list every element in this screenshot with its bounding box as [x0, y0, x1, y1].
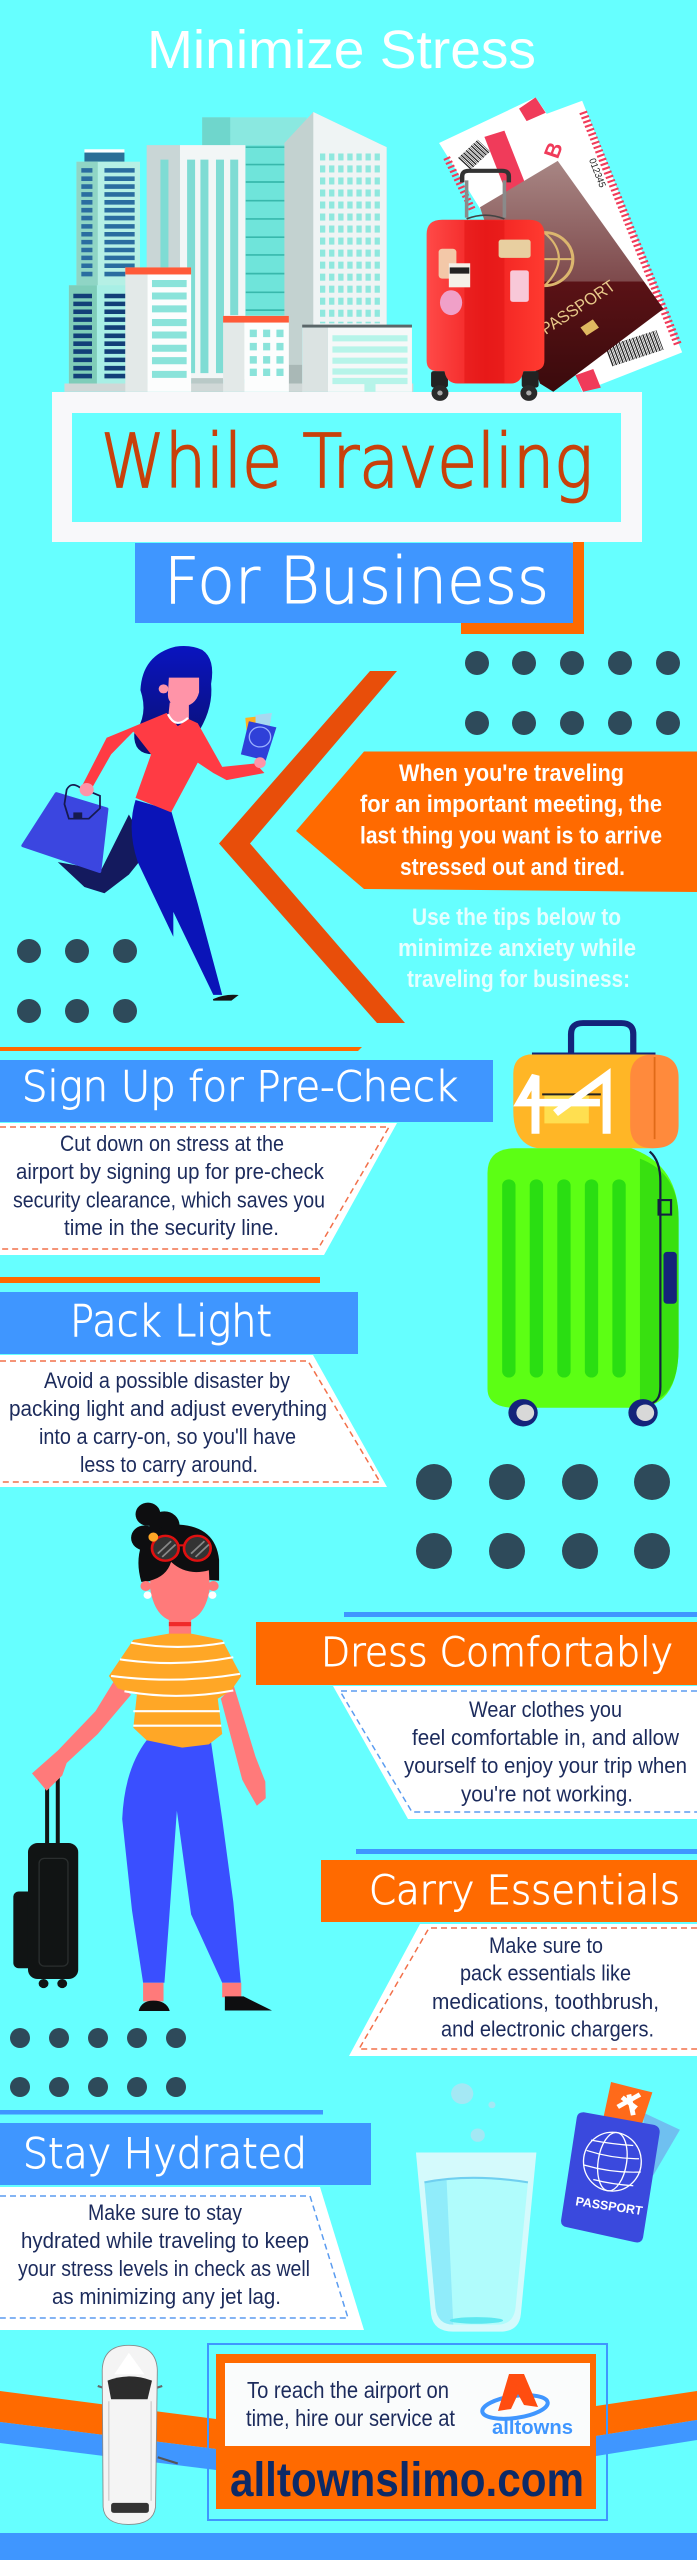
- section: Dress Comfortably: Wear clothes you: [469, 1697, 622, 1722]
- section: Stay Hydrated: your stress levels in check as well: [18, 2256, 310, 2281]
- call to action panel: [208, 2344, 607, 2520]
- pants: [122, 1740, 241, 1983]
- logo: alltowns: alltowns: [492, 2417, 573, 2439]
- section: Pack Light: into a carry-on, so you'll have: [39, 1424, 296, 1449]
- section: Sign Up for Pre-Check: Cut down on stress at the: [60, 1131, 284, 1156]
- heading bar: [0, 1060, 493, 1122]
- shoe: [213, 996, 236, 1000]
- red suitcase: [427, 171, 544, 401]
- section: Pack Light: [0, 1277, 387, 1487]
- heading text: Sign Up for Pre-Check: [22, 1062, 458, 1111]
- building: small red-top block: [223, 316, 289, 392]
- illustration: white limo top view: [98, 2345, 178, 2524]
- illustration: luggage stack: [488, 1023, 679, 1426]
- section: Stay Hydrated: [0, 2110, 371, 2330]
- heading bar: [0, 1292, 358, 1354]
- logo: alltowns: [481, 2374, 573, 2439]
- section: Carry Essentials: pack essentials like: [460, 1960, 631, 1986]
- building: striped middle tower: [147, 145, 245, 392]
- face: [150, 1562, 210, 1622]
- front leg: [132, 800, 222, 995]
- boarding pass front: [484, 101, 682, 392]
- heading text: Pack Light: [70, 1296, 272, 1347]
- section: Stay Hydrated: Make sure to stay: [88, 2200, 242, 2225]
- section: Sign Up for Pre-Check: [0, 1047, 493, 1255]
- text: use the tips: traveling for business:: [407, 966, 630, 993]
- text panel: [0, 2187, 364, 2330]
- black luggage: [13, 1773, 78, 1988]
- face and neck: [159, 678, 199, 726]
- glass: [416, 2153, 536, 2332]
- section: Pack Light: packing light and adjust everything: [9, 1396, 327, 1421]
- bonnet: [114, 2353, 144, 2374]
- green suitcase: [488, 1148, 679, 1426]
- title: Minimize Stress: Minimize Stress: [147, 20, 536, 80]
- roof side lines: [109, 2401, 151, 2501]
- road stripes: [0, 2391, 697, 2470]
- section: Sign Up for Pre-Check: airport by signing up for pre-check: [16, 1159, 325, 1184]
- building: blue window tower: [69, 149, 140, 384]
- callout: intro text: [296, 752, 697, 892]
- duffel bag: [513, 1023, 679, 1148]
- passport: [480, 161, 663, 392]
- boarding pass front: 012345: [586, 157, 608, 189]
- building: tall white tower: [284, 112, 387, 392]
- passport: PASSPORT: [536, 276, 619, 338]
- bubbles: [451, 2083, 496, 2142]
- callout: intro text: When you're traveling: [399, 760, 624, 787]
- section: Dress Comfortably: [256, 1612, 697, 1819]
- passport cover: PASSPORT: [575, 2194, 644, 2218]
- back leg: [58, 814, 149, 893]
- rear window: [111, 2503, 149, 2513]
- water: [424, 2178, 528, 2325]
- sunglasses: [148, 1532, 211, 1561]
- dots: lower left: [10, 2028, 186, 2097]
- torso and arms: [82, 713, 264, 812]
- choker: [169, 1622, 191, 1626]
- heading text: Dress Comfortably: [321, 1630, 673, 1676]
- dots: top right: [465, 651, 680, 735]
- car body: [102, 2345, 157, 2524]
- heading bar: [0, 2123, 371, 2185]
- orange box: [216, 2354, 596, 2509]
- hair and buns: [131, 1503, 219, 1582]
- orange ticket: [603, 2082, 652, 2124]
- heading: While Traveling: While Traveling: [101, 419, 593, 505]
- text: To reach the airport on: [247, 2377, 449, 2403]
- ankles: [143, 1983, 241, 2001]
- illustration: running woman: [23, 646, 276, 1000]
- text panel: [0, 1123, 397, 1255]
- necklace: [168, 714, 188, 723]
- text: use the tips: Use the tips below to: [412, 904, 621, 931]
- banner: For Business: For Business: [164, 545, 549, 619]
- website: alltownslimo.com: [230, 2454, 584, 2507]
- boarding pass front: B: [539, 139, 568, 161]
- section: Carry Essentials: [321, 1849, 697, 2056]
- section: Carry Essentials: medications, toothbrush,: [432, 1989, 659, 2014]
- illustration: city buildings: [64, 112, 413, 392]
- section: Sign Up for Pre-Check: time in the security line.: [64, 1215, 279, 1240]
- section: Carry Essentials: and electronic chargers.: [441, 2016, 654, 2042]
- chevron arrow: [219, 671, 405, 1023]
- outer outline: [208, 2344, 607, 2520]
- windshield: [108, 2376, 152, 2399]
- arms: [32, 1682, 266, 1806]
- boarding pass back: [439, 97, 600, 232]
- ears and earrings: [140, 1581, 219, 1599]
- white box: [225, 2363, 590, 2446]
- building: base strip: [64, 384, 413, 392]
- heading bar: [321, 1860, 697, 1922]
- text: use the tips: [398, 904, 636, 993]
- building: teal back tower: [202, 117, 307, 320]
- striped shirt: [109, 1634, 241, 1748]
- text panel: [349, 1924, 697, 2056]
- building: low block: [302, 325, 412, 392]
- passport cover: [561, 2112, 660, 2242]
- hand bag: [23, 783, 107, 871]
- hair: [134, 646, 212, 754]
- callout: intro text: last thing you want is to arrive: [360, 822, 662, 850]
- section: Pack Light: less to carry around.: [80, 1452, 258, 1477]
- text panel: [0, 1355, 387, 1487]
- callout: intro text: stressed out and tired.: [400, 854, 625, 881]
- call to action panel: time, hire our service at: [246, 2405, 456, 2431]
- passport in hand: [241, 713, 276, 768]
- section: Carry Essentials: Make sure to: [489, 1933, 603, 1958]
- bottom band: [0, 2533, 697, 2560]
- section: Sign Up for Pre-Check: security clearance, which saves you: [13, 1188, 325, 1212]
- heading text: Stay Hydrated: [23, 2129, 307, 2178]
- section: Dress Comfortably: feel comfortable in, and allow: [412, 1725, 679, 1750]
- heading bar: [256, 1622, 697, 1685]
- shoes: [139, 1996, 272, 2011]
- section: Stay Hydrated: hydrated while traveling to keep: [21, 2228, 309, 2253]
- neck: [169, 1616, 191, 1641]
- dots: big right: [416, 1464, 670, 1569]
- illustration: blue passport with tickets: [561, 2082, 680, 2242]
- illustration: standing woman with luggage: [13, 1503, 272, 2011]
- building: red-top block: [125, 267, 191, 392]
- dots: left: [17, 939, 137, 1023]
- white frame: [52, 392, 642, 542]
- callout: intro text: for an important meeting, the: [360, 791, 662, 818]
- heading text: Carry Essentials: [369, 1868, 680, 1914]
- title frame: [52, 392, 642, 542]
- text panel: [333, 1686, 697, 1819]
- section: Dress Comfortably: you're not working.: [461, 1782, 633, 1806]
- section: Pack Light: Avoid a possible disaster by: [44, 1368, 290, 1393]
- illustration: suitcase, tickets and passport: [427, 97, 682, 401]
- section: Stay Hydrated: as minimizing any jet lag.: [52, 2284, 281, 2309]
- text: use the tips: minimize anxiety while: [398, 935, 636, 962]
- illustration: glass of water: [416, 2083, 536, 2332]
- light blue ticket: [640, 2113, 680, 2175]
